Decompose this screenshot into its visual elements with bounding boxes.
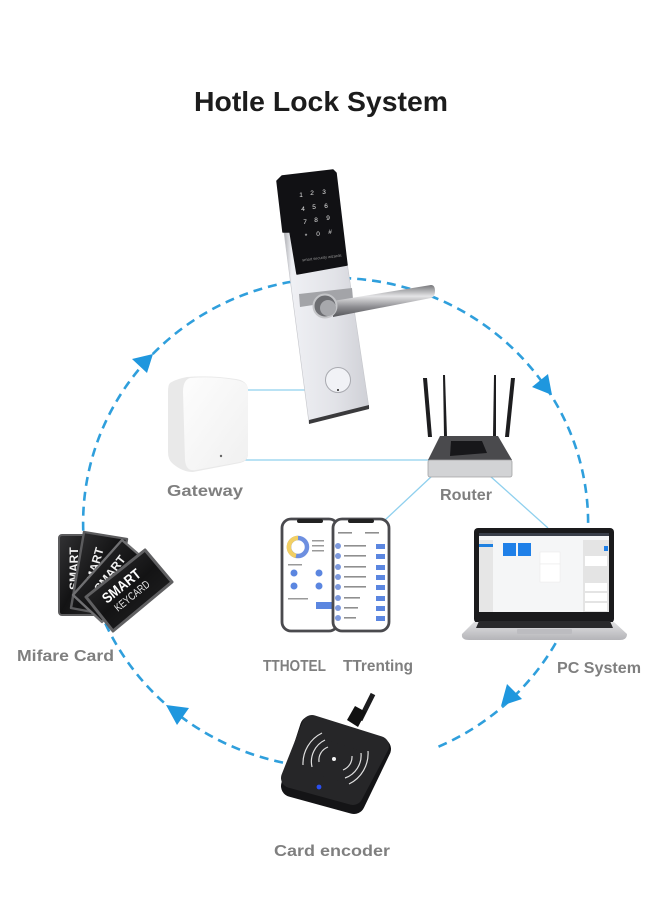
encoder base <box>292 727 380 803</box>
keypad digits: 4 <box>301 206 305 213</box>
laptop base <box>462 622 627 640</box>
label: Card encoder: Card encoder <box>274 843 390 860</box>
keypad digits: 1 <box>299 192 303 199</box>
card 2 <box>71 532 127 616</box>
gateway LED <box>220 455 222 457</box>
lock plate <box>283 225 369 423</box>
laptop lid <box>474 528 614 623</box>
router <box>423 375 515 477</box>
centre dot <box>332 757 336 761</box>
label: TTHOTEL: TTHOTEL <box>263 658 326 675</box>
laptop <box>462 528 627 640</box>
arrow: top left <box>132 354 153 373</box>
keypad digits: 0 <box>316 231 320 238</box>
phone: TTrenting <box>333 519 389 631</box>
blue LED <box>317 785 321 789</box>
card encoder <box>291 694 380 803</box>
keypad digits: 9 <box>326 215 330 222</box>
title: Hotle Lock System <box>194 86 448 117</box>
card 4 <box>86 550 172 631</box>
keypad digits: * <box>305 233 308 240</box>
label: TTrenting: TTrenting <box>343 658 413 675</box>
key cards <box>59 532 172 631</box>
keypad digits: # <box>328 229 332 236</box>
gateway label: Gateway <box>167 483 243 500</box>
gateway side <box>168 376 248 472</box>
lever handle band <box>299 288 353 307</box>
keypad digits: 7 <box>303 219 307 226</box>
keypad digits: 3 <box>322 189 326 196</box>
label: Mifare Card: Mifare Card <box>17 648 114 665</box>
antennas <box>423 375 515 437</box>
screen content <box>479 533 609 612</box>
router label: Router <box>440 487 492 504</box>
router top <box>428 436 512 460</box>
encoder cable <box>360 694 373 720</box>
gateway front <box>183 377 248 470</box>
router front <box>428 460 512 477</box>
connection lines <box>244 390 548 528</box>
dashed cycle ring <box>83 278 588 763</box>
lever handle bar <box>333 285 435 317</box>
laptop screen <box>479 533 609 612</box>
key cylinder cover <box>326 368 350 392</box>
phone: TTHOTEL <box>282 519 338 631</box>
key cards: SMART <box>81 545 107 591</box>
arrow: lower left <box>166 705 189 725</box>
keypad digits: smart security wizards <box>302 253 342 262</box>
arrow: lower right <box>501 684 522 706</box>
keypad digits: 2 <box>310 190 314 197</box>
label: PC System: PC System <box>557 660 641 677</box>
keypad digits: 6 <box>324 203 328 210</box>
arrow: top right <box>532 374 552 395</box>
card 1 <box>59 535 103 615</box>
encoder top <box>291 725 379 795</box>
plate bottom edge <box>309 405 369 424</box>
card 3 <box>73 540 152 622</box>
door lock <box>277 170 435 424</box>
card text: SMART <box>99 566 145 607</box>
keypad panel <box>277 170 347 274</box>
keypad digits: 8 <box>314 217 318 224</box>
keypad digits: 5 <box>312 204 316 211</box>
keypad digits <box>299 189 342 262</box>
key cards: SMART <box>91 552 129 595</box>
rfid waves <box>303 733 368 784</box>
key cards: SMART <box>67 547 81 590</box>
laptop keyboard <box>476 621 613 628</box>
gateway <box>168 376 248 472</box>
key cards: KEYCARD <box>112 579 153 614</box>
phones <box>282 519 389 631</box>
lever rosette <box>314 294 336 318</box>
